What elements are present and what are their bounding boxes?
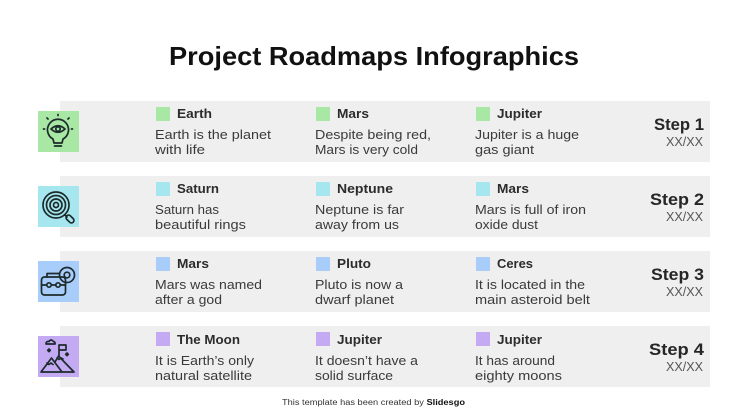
panel: step 2 row xyxy=(38,176,710,237)
column: Mars xyxy=(475,181,586,232)
footer credit: This template has been created by Slidesgo xyxy=(282,398,465,407)
step label 3: Step 3 xyxy=(651,265,704,284)
column: Jupiter xyxy=(315,332,419,383)
column: Ceres: Ceres xyxy=(497,256,533,271)
column: Mars: Mars xyxy=(497,181,529,196)
step label 2: Step 2 xyxy=(650,190,704,209)
step label 1: Step 1 xyxy=(654,115,704,134)
column: Jupiter: eighty moons xyxy=(475,368,563,383)
column: Mars: Mars is very cold xyxy=(315,142,418,157)
column: Mars: Despite being red, xyxy=(315,127,431,142)
column: Mars: Mars xyxy=(337,106,369,121)
column: Mars: Mars is full of iron xyxy=(475,202,586,217)
column: Neptune: Neptune is far xyxy=(315,202,405,217)
column: Mars: after a god xyxy=(155,292,222,307)
step label 2: XX/XX xyxy=(666,209,703,224)
column: Ceres: It is located in the xyxy=(475,277,585,292)
column: Mars: Mars was named xyxy=(155,277,262,292)
column: Mars xyxy=(315,106,431,157)
column: Mars: Mars xyxy=(177,256,209,271)
step label 2 xyxy=(650,190,704,224)
column: Jupiter: Jupiter xyxy=(337,332,382,347)
step label 4 xyxy=(649,340,705,374)
step label 4: Step 4 xyxy=(649,340,705,359)
column: Neptune xyxy=(315,181,405,232)
step label 1: XX/XX xyxy=(666,134,703,149)
column: Jupiter: solid surface xyxy=(315,368,393,383)
column: Jupiter: Jupiter xyxy=(497,106,542,121)
icon: light bulb with eye xyxy=(38,111,79,152)
column: Earth: Earth is the planet xyxy=(155,127,271,142)
column: Pluto: Pluto is now a xyxy=(315,277,404,292)
step label 4: XX/XX xyxy=(666,359,703,374)
column: Jupiter: It has around xyxy=(475,353,555,368)
column: Jupiter: It doesn’t have a xyxy=(315,353,419,368)
icon: briefcase with gear xyxy=(38,261,79,302)
column: The Moon: It is Earth’s only xyxy=(155,353,255,368)
column: Jupiter: gas giant xyxy=(475,142,534,157)
column: Earth: Earth xyxy=(177,106,212,121)
column: Pluto xyxy=(315,256,404,307)
column: Jupiter: Jupiter is a huge xyxy=(475,127,579,142)
column: The Moon: The Moon xyxy=(177,332,240,347)
column: Jupiter xyxy=(475,332,563,383)
column: Mars xyxy=(155,256,262,307)
column: Earth xyxy=(154,106,271,157)
column: Neptune: Neptune xyxy=(337,181,393,196)
column: The Moon xyxy=(155,332,255,383)
column: Jupiter xyxy=(475,106,579,157)
column: Saturn xyxy=(155,181,247,232)
step label 3 xyxy=(651,265,704,299)
icon: mountains with flag xyxy=(38,336,79,377)
panel: step 1 row xyxy=(38,101,710,162)
column: Neptune: away from us xyxy=(315,217,400,232)
column: Ceres xyxy=(475,256,590,307)
column: Earth: with life xyxy=(154,142,205,157)
title: Project Roadmaps Infographics xyxy=(169,41,579,71)
column: Saturn: Saturn xyxy=(177,181,219,196)
panel: step 3 row xyxy=(38,251,710,312)
icon: target with magnifier xyxy=(38,186,79,227)
panel: step 4 row xyxy=(38,326,710,387)
step label 3: XX/XX xyxy=(666,284,703,299)
column: Mars: oxide dust xyxy=(475,217,538,232)
column: Pluto: dwarf planet xyxy=(315,292,394,307)
step label 1 xyxy=(654,115,704,149)
column: Jupiter: Jupiter xyxy=(497,332,542,347)
column: Ceres: main asteroid belt xyxy=(475,292,590,307)
column: The Moon: natural satellite xyxy=(155,368,252,383)
column: Pluto: Pluto xyxy=(337,256,371,271)
column: Saturn: Saturn has xyxy=(155,202,220,217)
column: Saturn: beautiful rings xyxy=(155,217,247,232)
